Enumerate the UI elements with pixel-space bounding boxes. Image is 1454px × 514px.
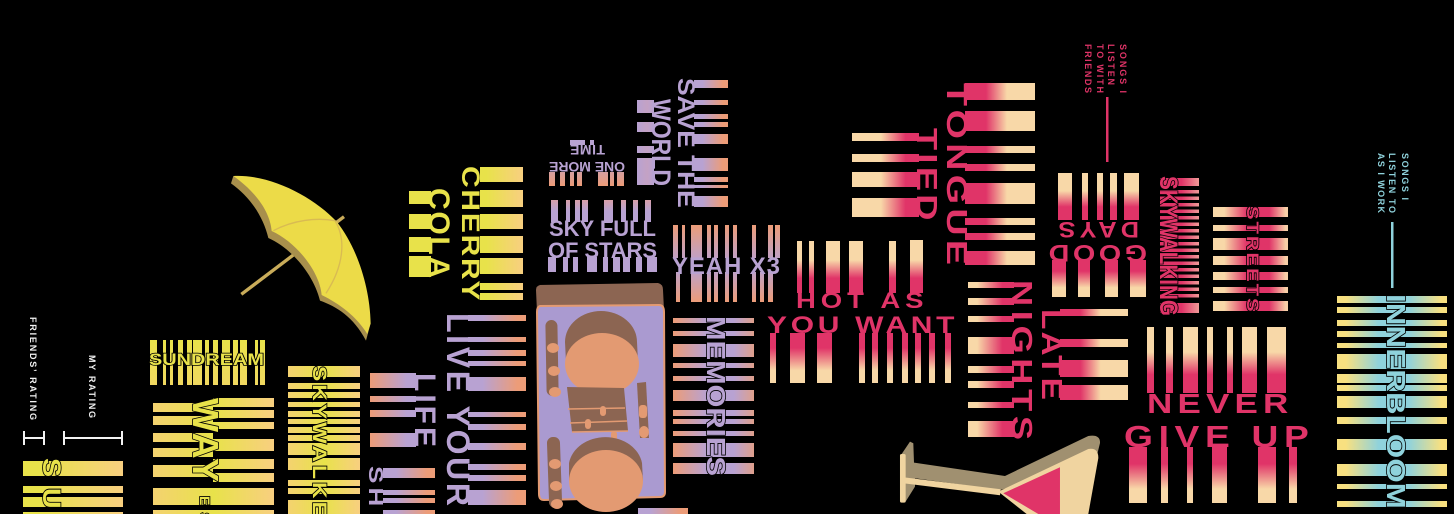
label: songs I listen to as I work: SONGS I <box>1400 153 1410 200</box>
song: Shake: SH <box>365 466 387 506</box>
label: songs I listen to with friends: TO WITH <box>1095 44 1105 93</box>
song: World <box>637 99 676 186</box>
song: You want <box>767 311 955 383</box>
label: songs I listen to with friends: FRIENDS <box>1083 44 1093 93</box>
song: Live your life: LIVE YOUR <box>440 313 476 506</box>
song: Never: NEVER <box>1147 387 1288 419</box>
song: Life <box>370 373 441 447</box>
song: Way <box>153 398 274 514</box>
song: Skywalker <box>288 366 360 514</box>
song: partial bar below boombox <box>638 508 688 514</box>
song: Streets: STREETS <box>1243 206 1262 312</box>
song: Streets <box>1213 206 1288 312</box>
song: One more time: TIME <box>570 142 605 158</box>
leader line: work <box>1391 222 1394 288</box>
song: Skywalking <box>1154 176 1199 316</box>
leader line: friends <box>1106 97 1108 162</box>
song: One more time <box>549 140 625 186</box>
song: Sky full of stars: OF STARS <box>548 238 657 263</box>
song: SU <box>23 458 123 514</box>
axis label: friends' rating: FRIENDS’ RATING <box>28 317 38 420</box>
song: Days <box>1058 173 1139 241</box>
song: Yeah x3: YEAH X3 <box>672 253 780 280</box>
label: songs I listen to with friends: LISTEN <box>1106 44 1116 85</box>
label: songs I listen to as I work <box>1376 153 1410 214</box>
song: Yeah x3 <box>672 225 780 302</box>
song: Give up <box>1124 420 1309 503</box>
song: Tongue: TONGUE <box>940 83 972 265</box>
song: You want: YOU WANT <box>767 311 955 338</box>
song: Cherry: CHERRY <box>457 166 485 300</box>
song: Innerbloom <box>1337 294 1447 509</box>
song: Good <box>1049 240 1147 297</box>
icon: yellow umbrella <box>231 176 371 341</box>
song: Memories <box>673 316 754 476</box>
song: Cherry <box>457 166 523 300</box>
song: Live your life <box>440 313 526 506</box>
song: Days: DAYS <box>1059 216 1139 241</box>
speaker: top <box>565 311 639 395</box>
speaker: bottom <box>569 437 643 512</box>
rating scale: friends <box>24 431 44 445</box>
song: Hot as: HOT AS <box>796 289 924 313</box>
song: Never <box>1147 327 1288 419</box>
label: songs I listen to as I work: AS I WORK <box>1376 153 1386 214</box>
song: Save the: SAVE THE <box>672 78 699 208</box>
song: Sundream <box>149 340 265 385</box>
song: One more time: ONE MORE <box>549 159 625 175</box>
song: Nights: NIGHTS <box>1006 280 1039 440</box>
rating scale: mine <box>64 431 122 445</box>
label: songs I listen to with friends: SONGS I <box>1118 44 1128 93</box>
song: Tied: TIED <box>911 128 944 220</box>
song: Life: LIFE <box>408 373 441 447</box>
label: songs I listen to with friends <box>1083 44 1128 93</box>
song: Good: GOOD <box>1049 240 1147 267</box>
song: Hot as <box>796 240 924 313</box>
song: Sundream: SUNDREAM <box>149 350 264 369</box>
controls: side buttons <box>545 320 649 509</box>
song: Nights <box>968 280 1039 440</box>
axis label: my rating: MY RATING <box>87 355 97 418</box>
song: Tongue <box>940 83 1035 265</box>
song: Memories: MEMORIES <box>701 316 731 476</box>
song: Shake <box>365 466 435 514</box>
song: Innerbloom: INNERBLOOM <box>1381 294 1410 509</box>
song: SU: SU <box>37 458 65 509</box>
icon: boombox <box>536 283 665 512</box>
song: Late: LATE <box>1036 309 1068 400</box>
song: Sky full of stars <box>548 200 657 272</box>
song: Skywalking: SKYWALKING <box>1154 176 1182 316</box>
song: World: WORLD <box>646 99 676 186</box>
song: Way: WAY <box>185 398 226 482</box>
icon: cocktail glass <box>900 436 1100 514</box>
song: Sky full of stars: SKY FULL <box>549 216 656 241</box>
song: Cola: COLA <box>422 188 455 278</box>
song: Save the <box>672 78 728 208</box>
song: Late <box>1036 309 1128 400</box>
label: songs I listen to as I work: LISTEN TO <box>1387 153 1397 213</box>
song: Give up: GIVE UP <box>1124 420 1309 454</box>
controls: centre sliders <box>567 387 628 442</box>
song: Tied <box>852 128 944 220</box>
